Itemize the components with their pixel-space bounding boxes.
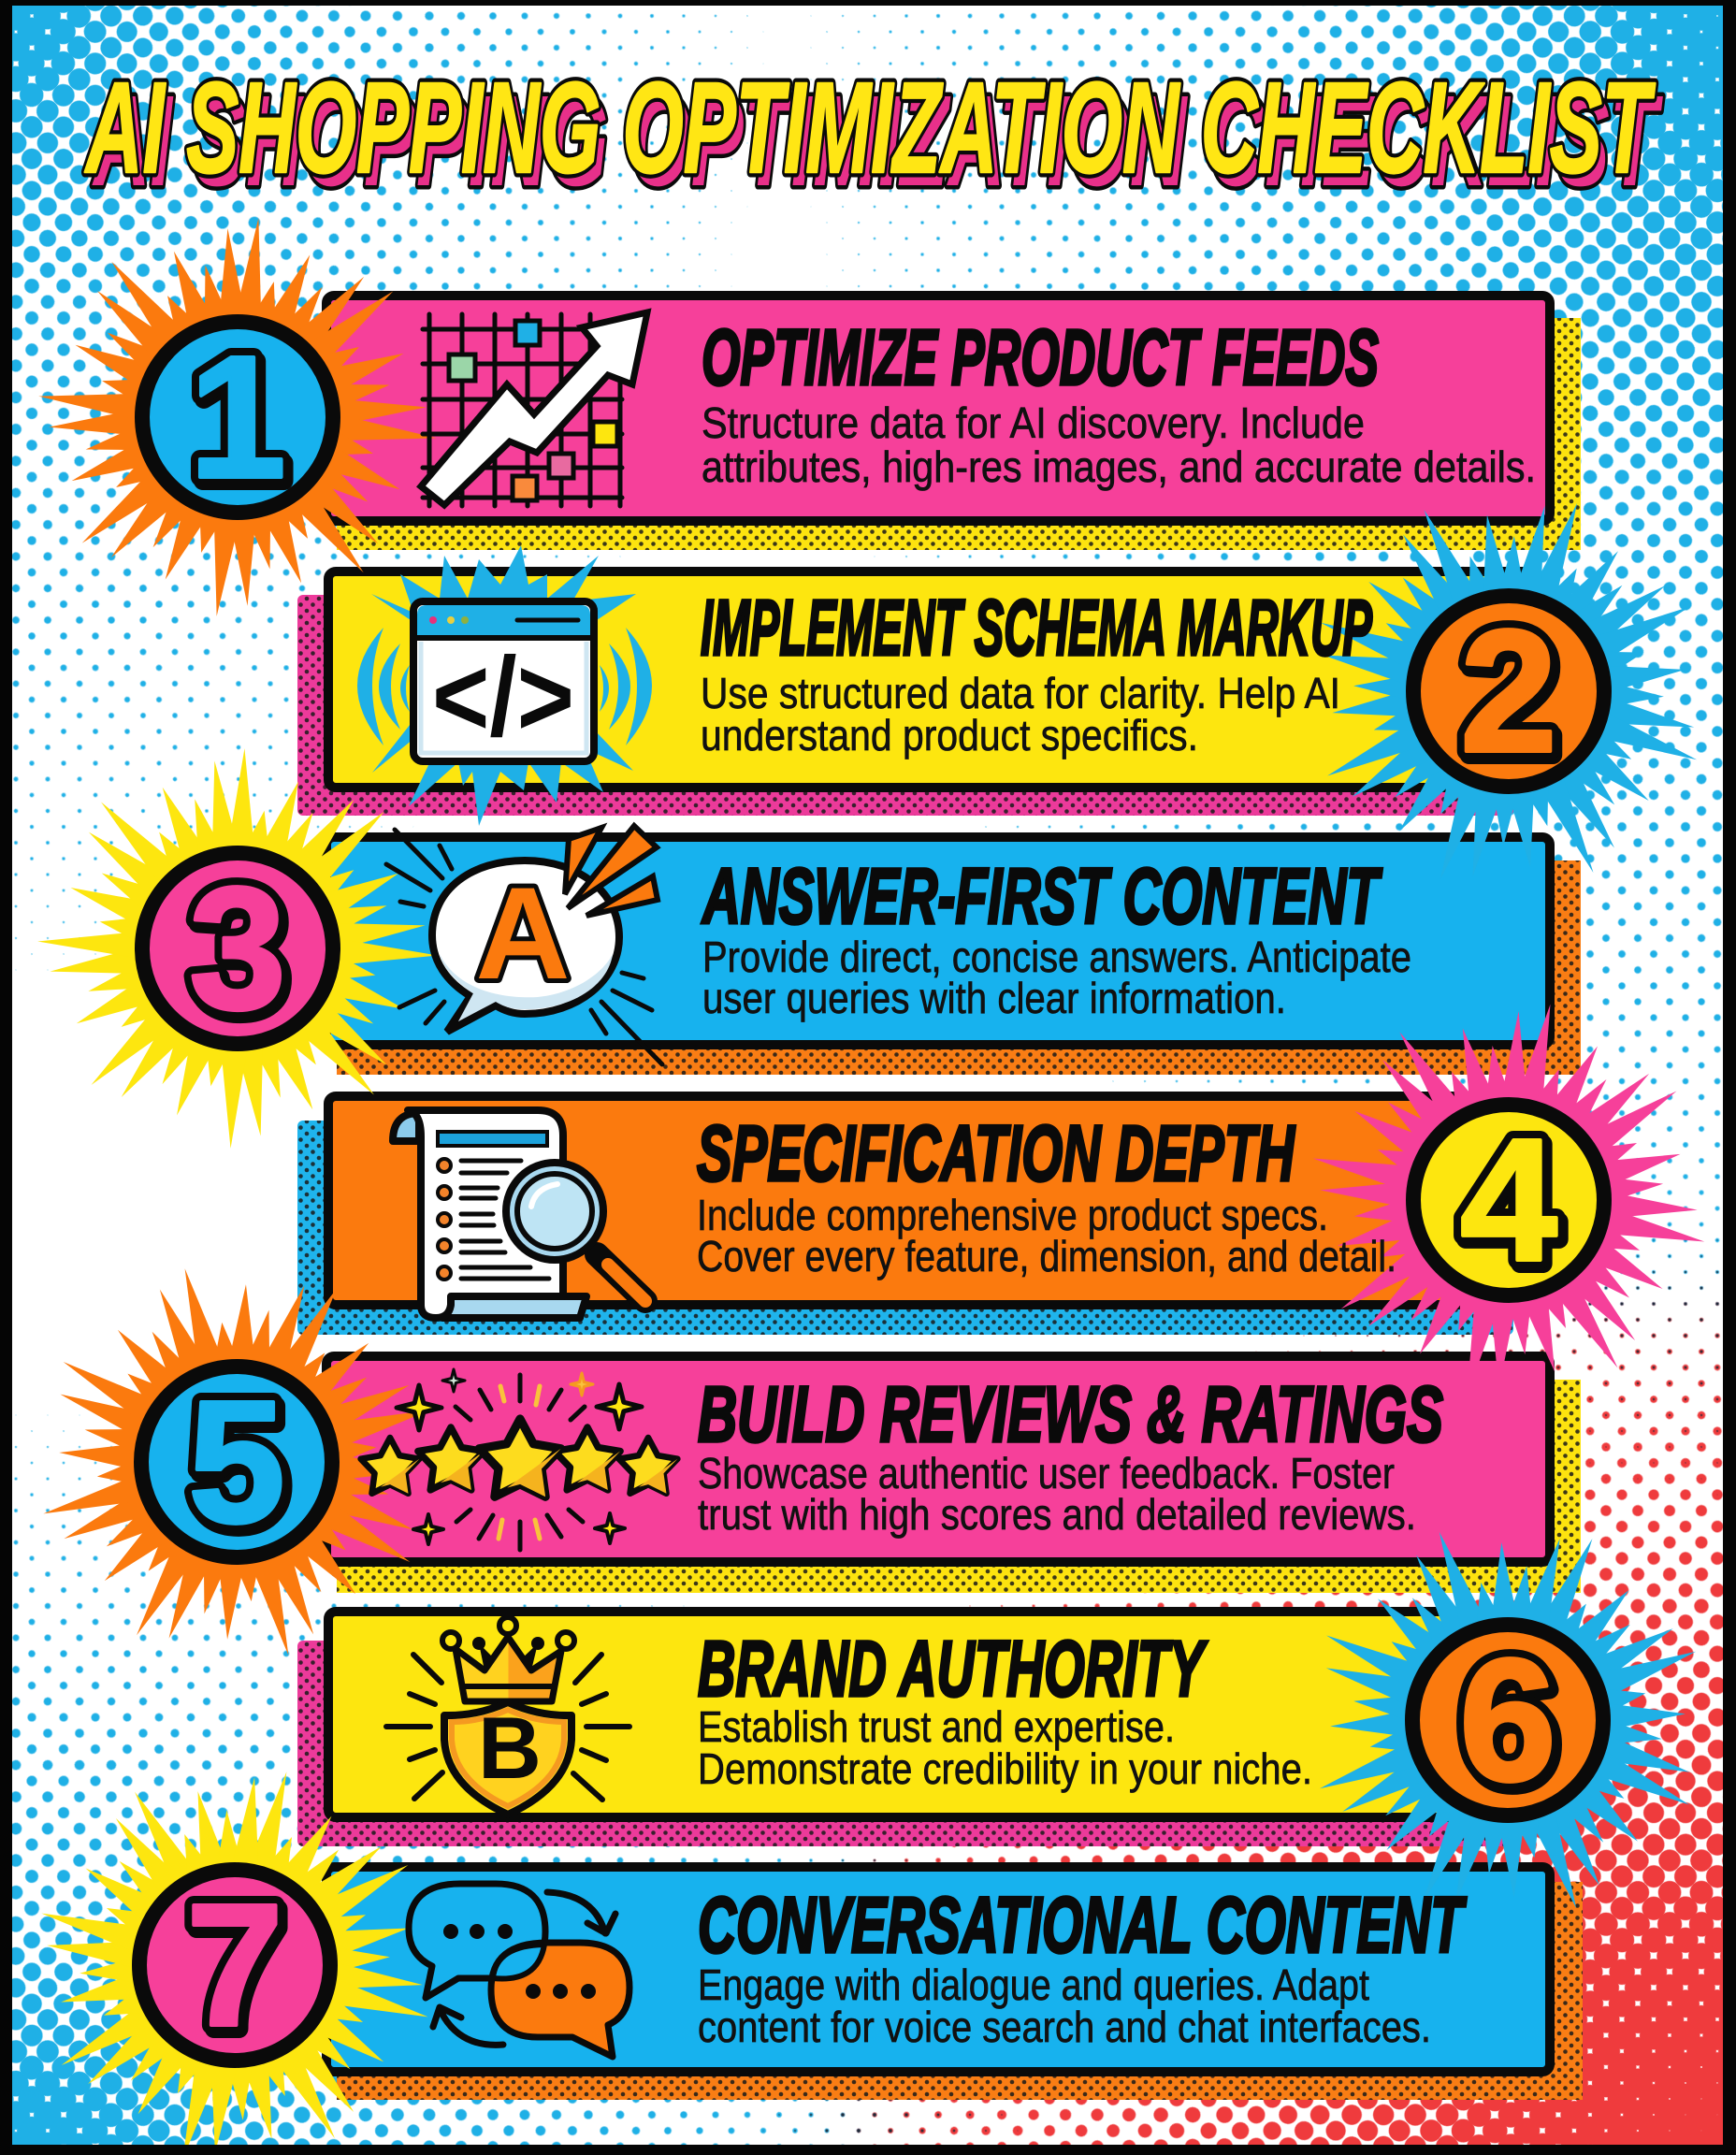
panel 6 heading: BRAND AUTHORITY bbox=[698, 1625, 1208, 1713]
badge 2: 2 bbox=[1460, 595, 1557, 788]
badge 5: 5 bbox=[188, 1366, 285, 1559]
panel 5 text: trust with high scores and detailed reviews. bbox=[698, 1490, 1416, 1539]
badge 7 bbox=[0, 1686, 514, 2155]
panel 1 text: attributes, high-res images, and accurate details. bbox=[702, 442, 1536, 491]
icon: crown and shield bbox=[386, 1617, 629, 1815]
icon: answer speech bubble: A bbox=[475, 860, 571, 1006]
badge 7: 7 bbox=[186, 1869, 283, 2062]
panel 4 heading: SPECIFICATION DEPTH bbox=[697, 1109, 1296, 1197]
icon: crown and shield: B bbox=[478, 1699, 542, 1797]
badge 4: 4 bbox=[1460, 1104, 1557, 1297]
panel 3 text: user queries with clear information. bbox=[702, 974, 1286, 1022]
panel 2 text: understand product specifics. bbox=[701, 711, 1198, 759]
badge 1: 1 bbox=[189, 321, 286, 514]
panel 1 text bbox=[702, 398, 1536, 491]
badge 6: 6 bbox=[1459, 1624, 1556, 1817]
badge 7: 7 bbox=[189, 1873, 286, 2066]
badge 4: 4 bbox=[1463, 1107, 1560, 1301]
panel 3 text: Provide direct, concise answers. Anticipate bbox=[702, 933, 1411, 981]
icon: conversation bubbles bbox=[409, 1884, 629, 2057]
icon: code window with burst: </> bbox=[432, 634, 574, 759]
icon: spec scroll and magnifier bbox=[393, 1110, 645, 1318]
panel 7 text: Engage with dialogue and queries. Adapt bbox=[698, 1960, 1369, 2009]
panel 7 text: content for voice search and chat interfaces. bbox=[698, 2003, 1431, 2051]
icon: answer speech bubble bbox=[386, 826, 662, 1064]
badge 2: 2 bbox=[1463, 599, 1560, 792]
panel 6 text: Demonstrate credibility in your niche. bbox=[698, 1744, 1312, 1793]
panel 6 card bbox=[297, 1612, 1535, 1846]
badge 3 bbox=[2, 713, 473, 1184]
panel 1 text: Structure data for AI discovery. Include bbox=[702, 398, 1365, 447]
badge 1: 1 bbox=[189, 321, 286, 514]
panel 1 heading: OPTIMIZE PRODUCT FEEDS bbox=[702, 313, 1379, 401]
icon: code window with burst bbox=[357, 545, 652, 826]
badge 2: 2 bbox=[1460, 595, 1557, 788]
panel 3 heading: ANSWER-FIRST CONTENT bbox=[702, 852, 1382, 940]
panel 5 text: Showcase authentic user feedback. Foster bbox=[698, 1449, 1395, 1497]
panel 5 card bbox=[326, 1356, 1581, 1593]
panel 6 text: Establish trust and expertise. bbox=[698, 1702, 1175, 1751]
badge 6 bbox=[1206, 1418, 1736, 2022]
panel 4 text: Cover every feature, dimension, and detail. bbox=[697, 1232, 1396, 1280]
panel 3 text bbox=[702, 933, 1411, 1022]
panel 4 text bbox=[697, 1191, 1396, 1280]
badge 4: 4 bbox=[1460, 1104, 1557, 1297]
badge 3: 3 bbox=[189, 852, 286, 1046]
panel 2 text: Use structured data for clarity. Help AI bbox=[701, 669, 1340, 717]
panel 1 card bbox=[326, 296, 1581, 550]
badge 6: 6 bbox=[1459, 1624, 1556, 1817]
panel 4 text: Include comprehensive product specs. bbox=[697, 1191, 1328, 1239]
panel 4 card bbox=[297, 1096, 1535, 1335]
panel 2 text bbox=[701, 669, 1340, 759]
badge 5 bbox=[0, 1151, 547, 1772]
panel 5 text bbox=[698, 1449, 1416, 1539]
icon: five star rating bbox=[361, 1369, 677, 1550]
badge 5: 5 bbox=[191, 1369, 288, 1563]
badge 1: 1 bbox=[192, 325, 289, 518]
badge 2 bbox=[1217, 399, 1736, 983]
panel 7 card bbox=[326, 1867, 1583, 2100]
panel 6 text bbox=[698, 1702, 1312, 1793]
badge 7: 7 bbox=[186, 1869, 283, 2062]
badge 4 bbox=[1238, 930, 1736, 1470]
panel 7 text bbox=[698, 1960, 1431, 2051]
badge 5: 5 bbox=[188, 1366, 285, 1559]
panel 2 card bbox=[297, 571, 1535, 816]
badge 3: 3 bbox=[192, 856, 289, 1049]
panel 3 card bbox=[326, 837, 1581, 1075]
badge 1 bbox=[0, 167, 487, 667]
badge 6: 6 bbox=[1462, 1627, 1559, 1821]
icon: rising chart on grid bbox=[421, 312, 647, 506]
badge 3: 3 bbox=[189, 852, 286, 1046]
